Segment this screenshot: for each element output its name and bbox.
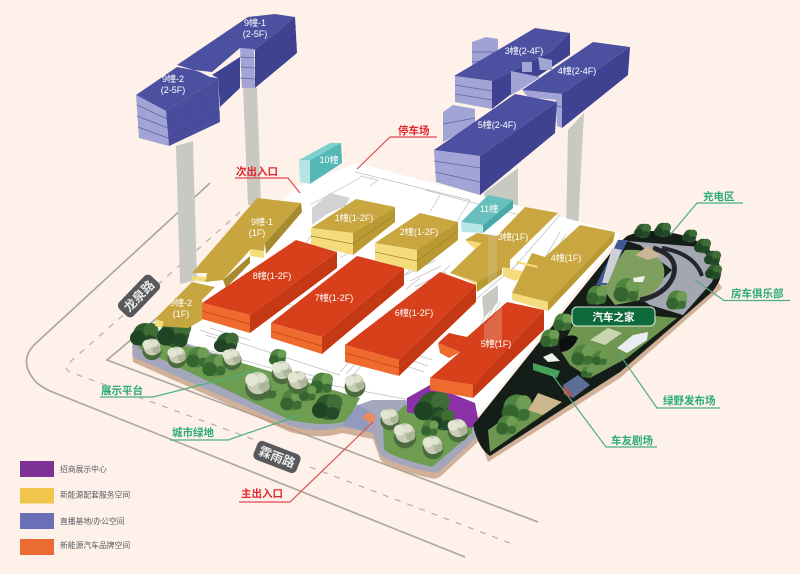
legend [20, 461, 130, 555]
building: 10幢 [299, 143, 342, 184]
building: 11幢 [461, 195, 513, 233]
label: 车友剧场 [550, 372, 657, 447]
building: 6幢 [345, 272, 476, 376]
building: 2幢 [375, 213, 458, 272]
label: 展示平台 [100, 370, 260, 397]
label: 城市绿地 [170, 415, 300, 440]
building: 5幢 F1 [430, 302, 544, 398]
label: 汽车之家 [572, 307, 655, 326]
label: 绿野发布场: 绿野发布场 [663, 394, 716, 407]
building: 5幢 office [434, 94, 557, 195]
label: 充电区: 充电区 [703, 190, 735, 203]
building: 9幢-2 F1: (1F) [173, 309, 189, 319]
label: 汽车之家: 汽车之家 [592, 310, 635, 324]
legend: 新能源汽车品牌空间 [60, 540, 130, 550]
label: 停车场 [357, 124, 437, 169]
building: 1幢 [311, 199, 395, 255]
building: 3幢 office: 3幢(2-4F) [505, 45, 543, 56]
road sign: 霖雨路 [252, 439, 302, 475]
building: 9幢-2 office: 9幢-2 [162, 73, 184, 84]
site base shadow [132, 280, 722, 479]
building: 8幢 [202, 240, 337, 333]
building: 9幢-1 F1: 9幢-1 [251, 216, 273, 227]
building: 4幢 office [522, 42, 630, 128]
building: 2幢: 2幢(1-2F) [400, 226, 438, 237]
label: 房车俱乐部: 房车俱乐部 [731, 287, 784, 300]
panel: site podium [130, 163, 622, 430]
building: 9幢-1 office: 9幢-1 [244, 17, 266, 28]
building: 3幢 office [454, 28, 570, 109]
building: 10幢: 10幢 [319, 154, 339, 165]
pillar foot between 3幢 and 5幢 [482, 285, 498, 318]
label: 次出入口 [235, 165, 300, 193]
building: 9幢-1 F1 [192, 198, 302, 288]
building: 4幢 F1 [512, 225, 615, 311]
label: 主出入口: 主出入口 [241, 487, 283, 500]
legend: 新能源配套服务空间 [60, 490, 130, 500]
label: 充电区 [670, 190, 743, 235]
building: 4幢 office: 4幢(2-4F) [558, 65, 596, 76]
building: 8幢: 8幢(1-2F) [253, 270, 291, 281]
building: 9幢-2 office [136, 67, 220, 146]
label: 车友剧场: 车友剧场 [611, 434, 653, 447]
label: 停车场: 停车场 [398, 124, 430, 137]
building: 11幢: 11幢 [480, 203, 498, 214]
road sign: 霖雨路: 霖雨路 [257, 443, 298, 471]
label: 主出入口 [239, 422, 373, 502]
building: 7幢: 7幢(1-2F) [315, 292, 353, 303]
building: 9幢-2 office: (2-5F) [161, 85, 185, 95]
road outlines [26, 183, 538, 557]
building: 3幢 F1: 3幢(1F) [498, 231, 528, 242]
building: 5幢 office: 5幢(2-4F) [478, 119, 516, 130]
building: 6幢: 6幢(1-2F) [395, 307, 433, 318]
building: 9幢-1 office: (2-5F) [243, 29, 267, 39]
building: 9幢-2 F1: 9幢-2 [170, 297, 192, 308]
building: 9幢-1 office [177, 14, 297, 107]
road sign: 龙泉路: 龙泉路 [121, 277, 158, 315]
label: 展示平台: 展示平台 [101, 384, 143, 397]
lower pillars [176, 88, 584, 284]
panel: car home park [473, 223, 722, 456]
building: 1幢: 1幢(1-2F) [335, 212, 373, 223]
road sign: 龙泉路 [116, 273, 162, 319]
label: 城市绿地: 城市绿地 [172, 426, 214, 439]
label: 次出入口: 次出入口 [236, 165, 278, 178]
building: 7幢 [271, 256, 404, 354]
label: 房车俱乐部 [695, 280, 790, 300]
label: 绿野发布场 [620, 355, 720, 408]
building: 招商展示中心 [380, 385, 478, 459]
building: 9幢-1 F1: (1F) [249, 228, 265, 238]
building: 9幢-2 F1 [155, 282, 215, 328]
gray service boxes [312, 193, 350, 225]
legend: 直播基地/办公空间 [60, 516, 125, 526]
building: 5幢 F1: 5幢(1F) [481, 338, 511, 349]
panel: city green space [130, 319, 478, 473]
legend: 招商展示中心 [60, 464, 107, 474]
building: 4幢 F1: 4幢(1F) [551, 252, 581, 263]
building: 3幢 F1 [450, 207, 558, 292]
